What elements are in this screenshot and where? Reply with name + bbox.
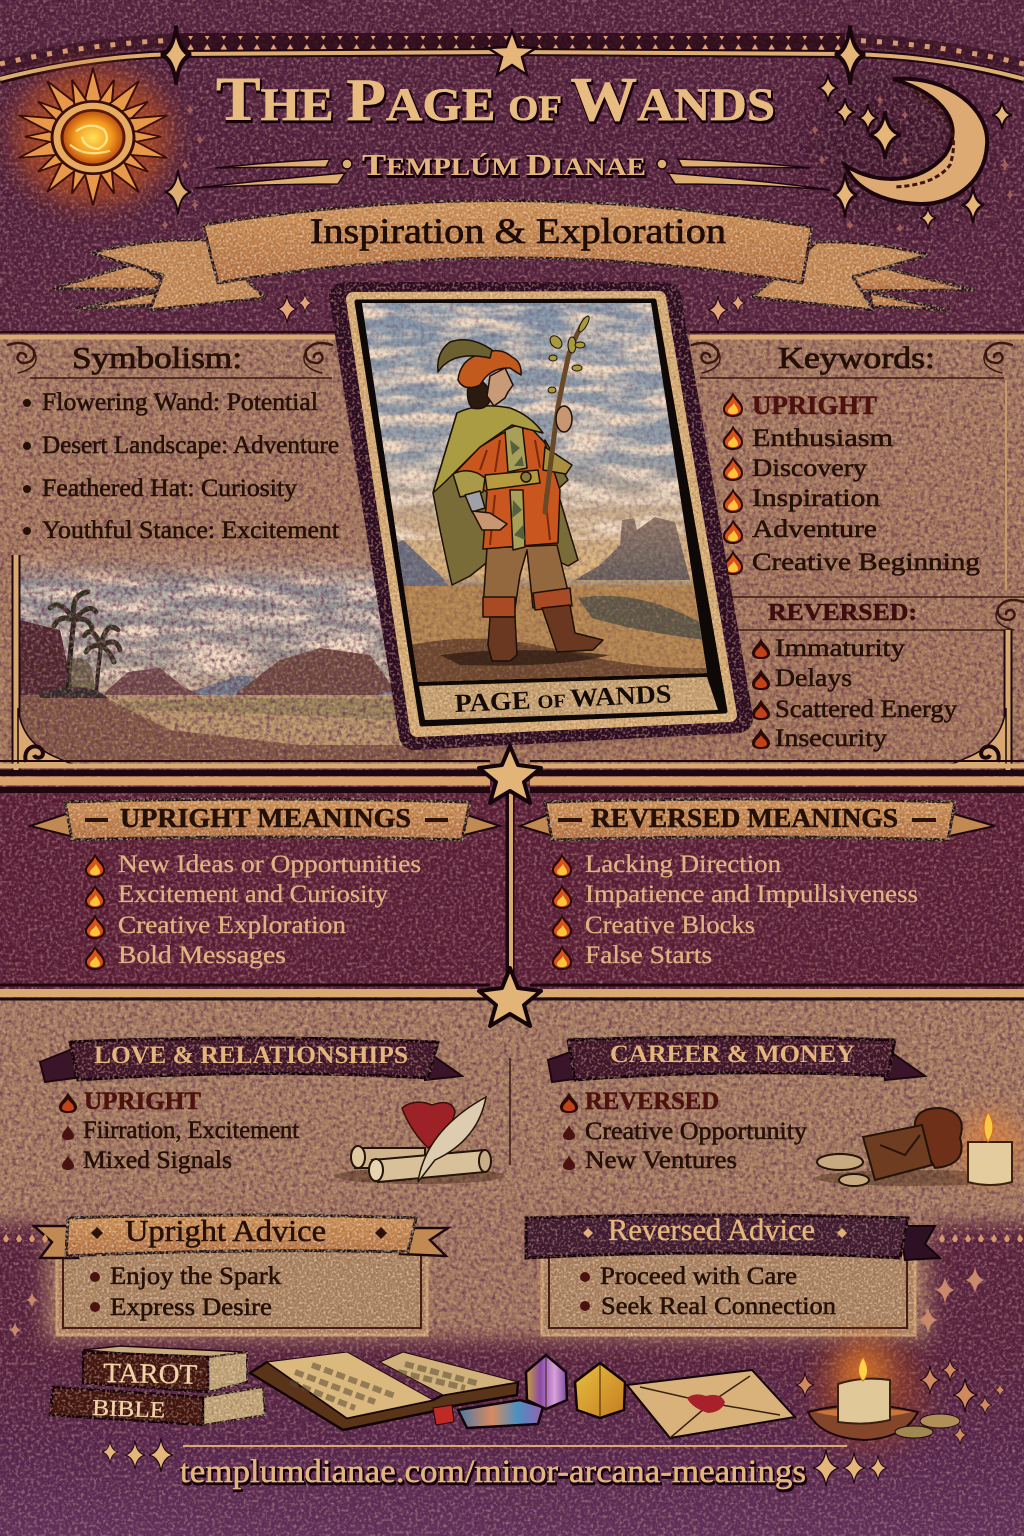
- icon: palm trees: [38, 592, 120, 698]
- advice: upright: Upright Advice: [125, 1213, 326, 1248]
- icon: sun: [15, 68, 171, 205]
- list: reversed meanings: Lacking Direction: [585, 851, 782, 878]
- banner: love and relationships: [40, 1038, 462, 1082]
- still life: books and objects: [50, 1340, 1005, 1450]
- subtitle: Templum Dianae: TEMPLÚM DIANAE: [362, 147, 646, 182]
- banner: love and relationships: LOVE & RELATIONSHIPS: [94, 1042, 408, 1069]
- advice: reversed: Seek Real Connection: [601, 1293, 837, 1320]
- reversed keywords: Scattered Energy: [775, 696, 958, 723]
- list: upright meanings: Creative Exploration: [118, 912, 347, 939]
- list: upright meanings: [85, 851, 421, 970]
- reversed keywords: Delays: [775, 665, 852, 692]
- left panel landscape: [0, 545, 450, 765]
- mountains and castle: [397, 540, 449, 590]
- list: [23, 389, 339, 544]
- advice: upright: Express Desire: [110, 1294, 272, 1321]
- love text: [59, 1088, 299, 1174]
- decorative sparkles beside advice: [0, 1228, 1024, 1338]
- banner: career and money: [548, 1037, 925, 1082]
- list: reversed meanings: [552, 851, 918, 970]
- advice: upright: [34, 1213, 448, 1335]
- sleeves and hands: [453, 471, 485, 497]
- parchment panels: symbolism and keywords: [0, 335, 1024, 767]
- icon: top stars: [161, 26, 865, 84]
- card caption: [419, 677, 718, 720]
- upright keywords: UPRIGHT: [752, 391, 877, 420]
- icon: tarot book: TAROT: [103, 1358, 197, 1391]
- icon: sealed envelope: [627, 1370, 795, 1438]
- wand: [545, 320, 585, 512]
- icon: star: [479, 968, 541, 1026]
- subtitle: Templum Dianae: [165, 147, 830, 214]
- ribbon: Inspiration & Exploration: Inspiration & Exploration: [310, 211, 726, 251]
- box: [542, 1245, 915, 1335]
- icon: chest, pouch, coins and candle: [815, 1108, 1022, 1186]
- career text: REVERSED: [585, 1088, 719, 1115]
- title: THE PAGE OF WANDS: [216, 66, 775, 134]
- panel: symbolism: [0, 332, 340, 770]
- box: [57, 1245, 427, 1335]
- upright keywords: Discovery: [752, 455, 868, 482]
- panel: keywords: [690, 332, 1024, 770]
- dark mottled area behind moon: [810, 65, 980, 225]
- banner: upright meanings: [30, 799, 500, 840]
- legs: [483, 545, 570, 608]
- advice: reversed: [526, 1212, 940, 1335]
- ribbon: Inspiration & Exploration: [52, 200, 974, 324]
- upright keywords: [723, 391, 981, 576]
- love text: UPRIGHT: [84, 1088, 201, 1115]
- tarot card: Page of Wands: [344, 297, 742, 745]
- banner: upright meanings: UPRIGHT MEANINGS: [120, 803, 411, 833]
- career text: [560, 1088, 808, 1174]
- advice: reversed: Proceed with Care: [600, 1263, 797, 1290]
- card art: [350, 300, 720, 690]
- cape collar: [433, 406, 543, 493]
- list: Flowering Wand: Potential: [42, 389, 318, 416]
- ember scatter behind candle: [796, 1340, 1005, 1450]
- hair: [466, 381, 490, 410]
- list: upright meanings: New Ideas or Opportunities: [118, 851, 421, 878]
- banner: reversed meanings: [520, 799, 995, 840]
- divider: upper: [0, 746, 1024, 980]
- footer URL: templumdianae.com/minor-arcana-meanings: [180, 1454, 806, 1490]
- tunic: [456, 427, 560, 549]
- icon: bible book: [50, 1387, 265, 1425]
- divider: lower: [0, 968, 1024, 1026]
- card caption: PAGE OF WANDS: [454, 679, 672, 718]
- love text: Fiirration, Excitement: [83, 1117, 299, 1144]
- reversed keywords: REVERSED:: [768, 600, 917, 626]
- reversed keywords: [752, 600, 958, 752]
- career text: New Ventures: [585, 1147, 737, 1174]
- icon: scrolls, heart and quill: [335, 1097, 505, 1184]
- advice: reversed: Reversed Advice: [608, 1212, 815, 1247]
- figure: the page: [433, 315, 603, 661]
- icon: candle and bowl: [808, 1346, 960, 1440]
- upright keywords: Enthusiasm: [752, 425, 894, 452]
- face: [487, 368, 513, 406]
- list: reversed meanings: Impatience and Impullsiveness: [585, 881, 918, 908]
- list: Youthful Stance: Excitement: [42, 517, 339, 544]
- advice: upright: Enjoy the Spark: [110, 1263, 282, 1290]
- upright keywords: Creative Beginning: [752, 549, 981, 576]
- list: Desert Landscape: Adventure: [42, 432, 339, 459]
- list: reversed meanings: Creative Blocks: [585, 912, 755, 939]
- list: reversed meanings: False Starts: [585, 942, 712, 969]
- reversed keywords: Immaturity: [775, 635, 906, 662]
- career text: Creative Opportunity: [585, 1118, 808, 1145]
- reversed keywords: Insecurity: [775, 725, 888, 752]
- upright keywords: Adventure: [752, 516, 877, 543]
- list: Feathered Hat: Curiosity: [42, 475, 298, 502]
- upright keywords: Inspiration: [752, 485, 881, 512]
- parchment: lower section: [0, 985, 1024, 1340]
- ground shadow: [440, 650, 610, 666]
- mid band darker tone: [0, 790, 1024, 990]
- icon: crescent moon and stars: [161, 74, 1014, 234]
- cape back: [432, 412, 486, 586]
- icon: bible book: BIBLE: [92, 1395, 166, 1423]
- icon: tarot book: [83, 1346, 247, 1392]
- top border: [0, 26, 1024, 84]
- hat: [458, 351, 521, 388]
- icon: crystals and stone: [458, 1355, 625, 1428]
- banner: career and money: CAREER & MONEY: [610, 1041, 855, 1068]
- banner: reversed meanings: REVERSED MEANINGS: [591, 803, 898, 833]
- list: upright meanings: Bold Messages: [118, 942, 286, 969]
- icon: star: [479, 746, 541, 803]
- love text: Mixed Signals: [83, 1147, 232, 1174]
- list: upright meanings: Excitement and Curiosity: [118, 881, 389, 908]
- heading: Keywords:: [778, 340, 935, 375]
- footer rule and stars: [102, 1438, 887, 1486]
- icon: open book: [250, 1352, 518, 1430]
- heading: Symbolism:: [72, 340, 242, 375]
